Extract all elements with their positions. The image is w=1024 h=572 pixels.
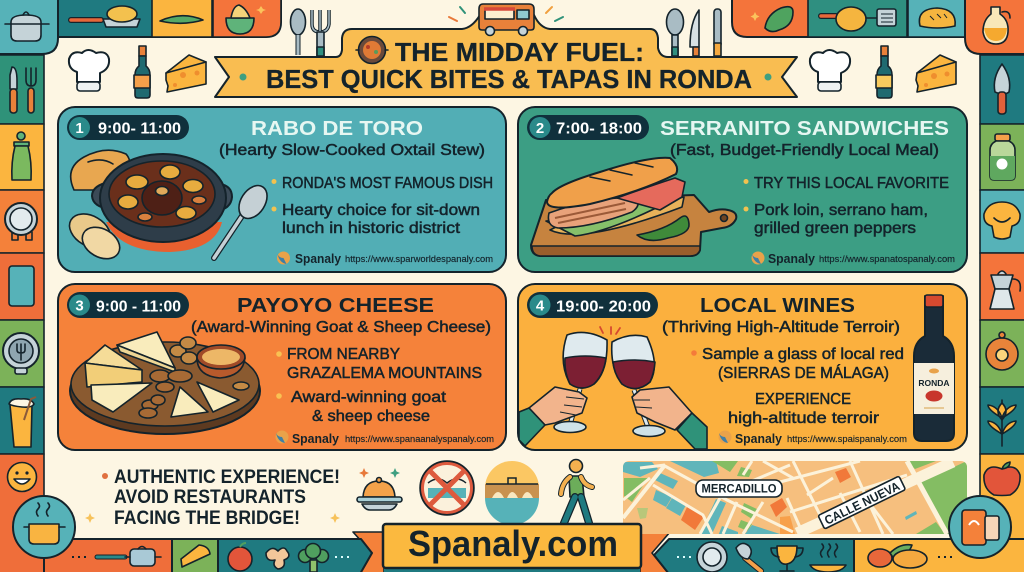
source line: https://www.spaispanaly.com	[787, 434, 907, 444]
bullet list: Sample a glass of local red	[702, 346, 904, 363]
icon: utensils right	[666, 9, 721, 56]
time badge 1: 9:00- 11:00	[98, 120, 181, 138]
icon: green bottle	[990, 134, 1015, 180]
icon: trowel knife	[994, 64, 1010, 114]
icon: broccoli	[298, 544, 349, 572]
icon: plate with fork	[3, 333, 39, 374]
map label: Mercadillo	[696, 480, 782, 497]
bullet list: high-altitude terroir	[728, 410, 880, 427]
icon: apple	[984, 462, 1020, 496]
time badge 3: 9:00 - 11:00	[96, 298, 181, 316]
icon: steaming plate	[810, 544, 846, 572]
icon: yellow chef mushroom	[984, 202, 1020, 239]
top-right border strip	[732, 0, 1024, 54]
time badge 4	[527, 292, 658, 318]
icon: cheese right	[916, 55, 956, 92]
icon: small pan	[72, 546, 161, 566]
bullet list: FROM NEARBY	[287, 346, 400, 363]
corner badge: cooking pot	[13, 496, 75, 558]
subheading: (Hearty Slow-Cooked Oxtail Stew)	[219, 142, 485, 159]
panel 2: Serranito Sandwiches	[518, 107, 967, 272]
source line: Spanaly	[292, 431, 340, 446]
time badge 4: 19:00- 20:00	[556, 298, 651, 316]
source line	[277, 251, 493, 266]
tip text: authentic experience: AUTHENTIC EXPERIENCE!	[114, 467, 340, 488]
icon: oil jar	[983, 7, 1010, 44]
bullet list	[744, 175, 949, 237]
bullet list: lunch in historic district	[282, 220, 461, 237]
time badge 2: 2	[536, 120, 544, 137]
bullet list: Award-winning goat	[291, 389, 447, 406]
illustration: Ronda wine bottle	[914, 295, 954, 441]
bottom border strip	[44, 532, 1024, 572]
source line	[752, 251, 955, 266]
illustration: oxtail stew pot	[63, 150, 273, 265]
illustration: sandwich on board	[531, 158, 736, 256]
title banner	[215, 15, 797, 97]
icon: beer glass	[9, 397, 36, 447]
panel 1: Rabo de Toro	[58, 107, 506, 272]
subheading: (Award-Winning Goat & Sheep Cheese)	[191, 319, 491, 336]
icon: wheat	[988, 400, 1016, 446]
source line	[718, 430, 907, 446]
icon: food truck	[449, 4, 563, 36]
icon: apple	[228, 543, 252, 571]
time badge 4: 4	[536, 298, 545, 314]
map label: Mercadillo: MERCADILLO	[702, 484, 777, 496]
time badge 1	[67, 115, 189, 140]
tip text: authentic experience: FACING THE BRIDGE!	[114, 508, 300, 529]
time badge 3	[67, 292, 189, 318]
bullet list	[272, 175, 493, 237]
icon: lettuce	[750, 7, 793, 32]
bullet list: GRAZALEMA MOUNTAINS	[287, 365, 482, 382]
icon: spatula	[736, 543, 761, 571]
map label: Calle Nueva: CALLE NUEVA	[822, 479, 902, 528]
icon: wine bottle left	[134, 46, 150, 98]
panel 4: Local Wines	[518, 284, 967, 450]
icon: ladle and spatula	[821, 7, 896, 31]
heading line two: BEST QUICK BITES & TAPAS IN RONDA	[266, 64, 752, 94]
icon: bridge in circle	[485, 461, 539, 525]
corner badge: phone and map	[949, 496, 1011, 558]
time badge 3: 3	[75, 298, 84, 314]
bullet list: Pork loin, serrano ham,	[754, 202, 928, 219]
right border column	[980, 55, 1024, 572]
illustration: Ronda wine bottle: RONDA	[918, 378, 950, 388]
bullet list: & sheep cheese	[312, 408, 430, 425]
bullet list: (SIERRAS DE MÁLAGA)	[718, 365, 889, 382]
source line	[276, 430, 494, 446]
icon: plate	[677, 542, 727, 572]
time badge 2	[527, 115, 649, 140]
icon: pan with rice	[71, 6, 140, 27]
icon: moka pot	[990, 271, 1020, 309]
icon: cheese left	[166, 55, 206, 92]
heading line one: THE MIDDAY FUEL:	[395, 37, 644, 67]
subheading: (Thriving High-Altitude Terroir)	[662, 319, 900, 336]
icon: round board	[986, 332, 1018, 370]
illustration: wine toast	[519, 327, 707, 449]
icon: cheese	[181, 545, 210, 567]
icon: smiley	[8, 462, 36, 492]
bullet list: grilled green peppers	[754, 220, 916, 237]
bullet list: RONDA'S MOST FAMOUS DISH	[282, 175, 493, 192]
icon: pot	[5, 12, 49, 41]
icon: spoon and fork left	[290, 9, 329, 56]
website banner: Spanaly.com	[408, 523, 618, 564]
icon: bread loaf	[919, 8, 955, 28]
source line: Spanaly	[735, 431, 783, 446]
icon: walking person	[561, 460, 592, 523]
heading: Payoyo Cheese: PAYOYO CHEESE	[237, 295, 434, 317]
panel 3: Payoyo Cheese	[58, 284, 506, 450]
icon: teal cup	[9, 266, 34, 306]
bullet list: Hearty choice for sit-down	[282, 202, 480, 219]
source line: https://www.spanaanalyspanaly.com	[345, 434, 494, 444]
illustration: cheese platter	[70, 332, 260, 434]
heading: Serranito Sandwiches: SERRANITO SANDWICHES	[660, 118, 949, 140]
icon: ginger	[266, 548, 289, 569]
bullet list: EXPERIENCE	[755, 391, 851, 408]
tip text: authentic experience: AVOID RESTAURANTS	[114, 487, 306, 508]
source line: https://www.spanatospanaly.com	[819, 254, 955, 264]
icon: paella pan	[356, 36, 388, 64]
heading: Rabo de Toro: RABO DE TORO	[251, 118, 423, 140]
time badge 1: 1	[75, 120, 84, 137]
source line: Spanaly	[768, 251, 816, 266]
icon: chef hat left	[69, 50, 109, 91]
left border column	[0, 55, 44, 572]
icon: wine bottle right	[876, 46, 892, 98]
bullet list: TRY THIS LOCAL FAVORITE	[754, 175, 949, 192]
source line: https://www.sparworldespanaly.com	[345, 254, 493, 264]
icon: bowl	[226, 5, 266, 34]
top-left border strip	[0, 0, 281, 54]
icon: knife and fork	[10, 67, 36, 113]
icon: serving cloche	[357, 478, 402, 510]
time badge 2: 7:00- 18:00	[556, 120, 642, 138]
street map	[623, 461, 967, 536]
bullet list	[276, 346, 482, 425]
tip text: authentic experience	[85, 467, 400, 529]
icon: trophy	[771, 546, 803, 571]
heading: Local Wines: LOCAL WINES	[700, 295, 855, 317]
source line: Spanaly	[295, 251, 342, 266]
icon: pile of food	[868, 545, 952, 568]
icon: pepper mill	[12, 132, 31, 180]
icon: chef hat right	[810, 50, 850, 91]
subheading: (Fast, Budget-Friendly Local Meal)	[670, 142, 939, 159]
bullet list	[691, 346, 904, 427]
icon: herb on plate	[160, 16, 203, 23]
icon: no bridge-view sign	[421, 462, 473, 514]
icon: plate on stand	[5, 203, 37, 240]
